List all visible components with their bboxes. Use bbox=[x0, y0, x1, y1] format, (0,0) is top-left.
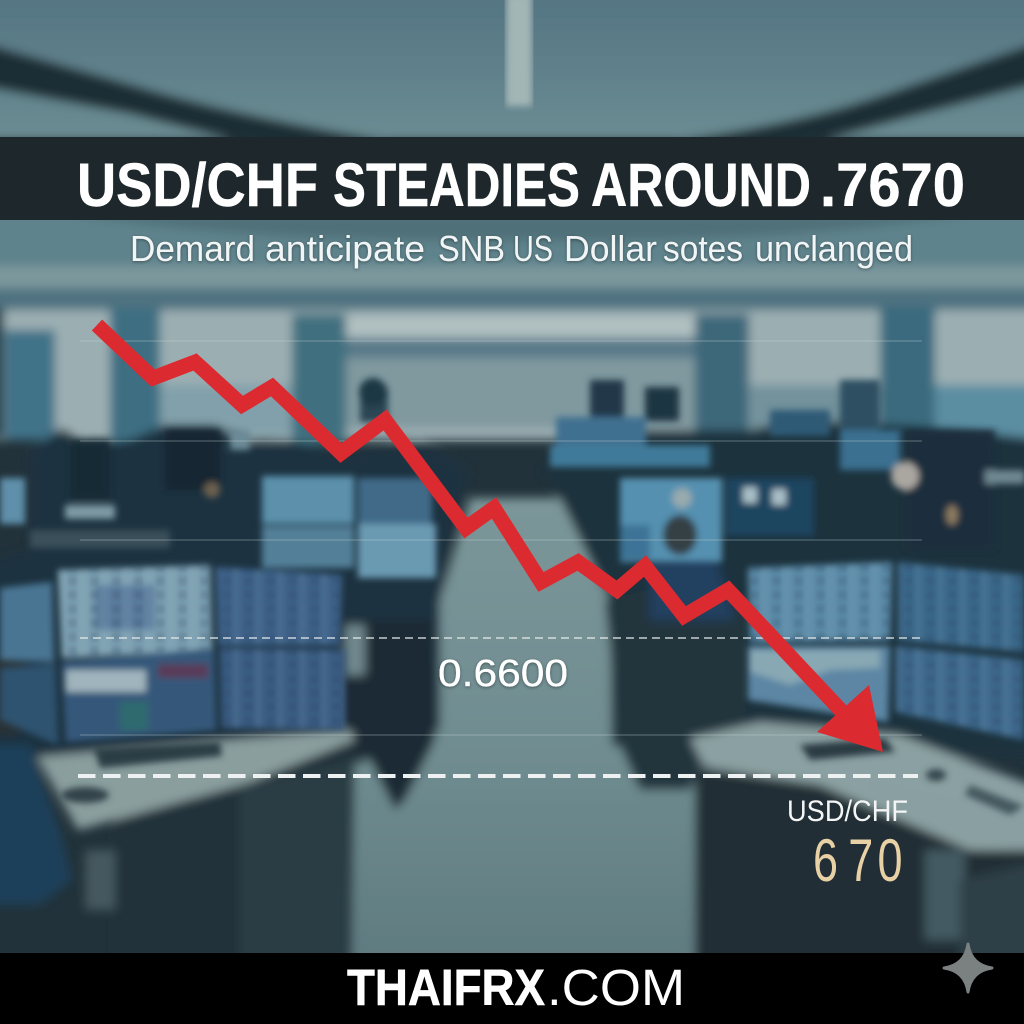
windows bbox=[0, 310, 1024, 440]
digital price readout bbox=[813, 828, 903, 895]
level label 0.6600: 0.6600 bbox=[438, 653, 568, 695]
ceiling light bbox=[506, 0, 532, 106]
digital price readout: 0 bbox=[878, 828, 903, 895]
digital price readout: 7 bbox=[848, 828, 873, 895]
subtitle: unclanged bbox=[755, 228, 913, 269]
red falling price arrow bbox=[97, 325, 883, 752]
subtitle: US bbox=[513, 228, 553, 269]
title: USD/CHF bbox=[77, 151, 318, 219]
subtitle: SNB bbox=[438, 228, 505, 269]
subtitle: anticipate bbox=[265, 228, 425, 269]
subtitle: Demard bbox=[130, 228, 255, 269]
footer brand bbox=[347, 959, 685, 1016]
person lower-left bbox=[0, 655, 34, 735]
chart gridlines bbox=[78, 341, 922, 776]
title banner bbox=[0, 137, 1024, 220]
title: .7670 bbox=[820, 151, 965, 219]
subtitle: Dollar bbox=[564, 228, 657, 269]
desks bbox=[37, 730, 355, 830]
aisle bbox=[350, 498, 700, 965]
footer bar bbox=[0, 953, 1024, 1024]
pair label USD/CHF: USD/CHF bbox=[787, 795, 908, 828]
keyboards and desk items bbox=[94, 742, 222, 768]
footer brand: .COM bbox=[547, 959, 685, 1016]
title: AROUND bbox=[591, 151, 811, 219]
subtitle: sotes bbox=[663, 228, 743, 269]
subtitle bbox=[130, 228, 913, 269]
desk structures and chairs bbox=[115, 745, 355, 965]
icon: sparkle star bbox=[944, 944, 992, 992]
screens bbox=[58, 565, 212, 658]
title bbox=[77, 151, 965, 219]
ceiling bbox=[0, 0, 1024, 140]
far-row dark masses bbox=[0, 425, 470, 760]
title: STEADIES bbox=[333, 151, 580, 219]
far figures and screens bbox=[360, 388, 388, 422]
digital price readout: 6 bbox=[813, 828, 838, 895]
footer brand: THAIFRX bbox=[347, 959, 545, 1016]
